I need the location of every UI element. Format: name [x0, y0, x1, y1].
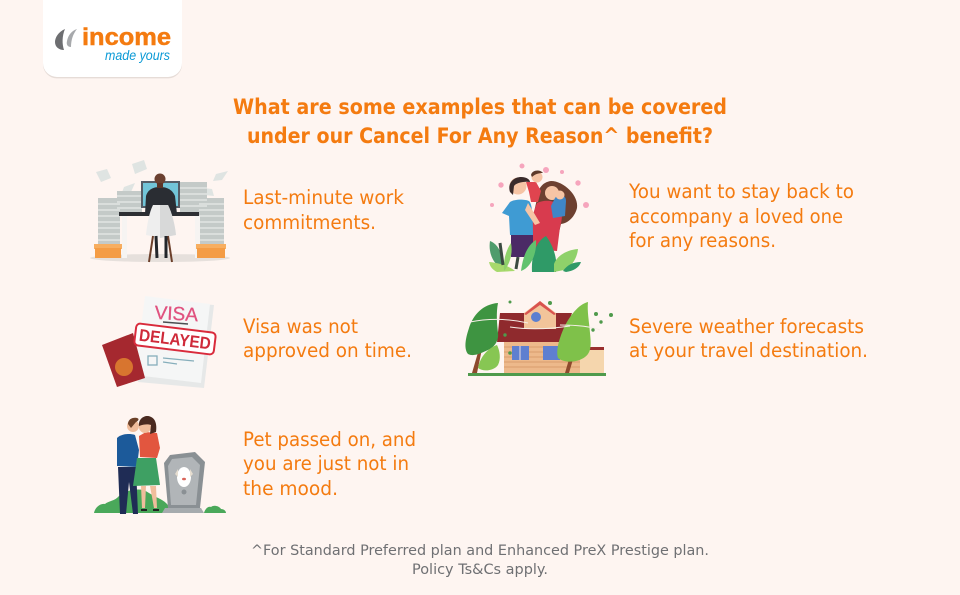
text: visa not approved [243, 315, 412, 362]
footnote: ^For Standard Preferred plan and Enhanced PreX Prestige plan. [251, 543, 709, 559]
text: pet passed on: Pet passed on, and [243, 428, 416, 451]
text: last-minute work [243, 186, 405, 234]
text: severe weather: at your travel destination. [629, 339, 868, 362]
title: under our Cancel For Any Reason^ benefit? [247, 124, 713, 148]
illustration: delayed visa: DELAYED [138, 326, 212, 353]
illustration: delayed visa: VISA [154, 303, 199, 326]
illustration: overworked person at desk [90, 160, 230, 262]
illustration: delayed visa [102, 296, 216, 388]
text: pet passed on: the mood. [243, 477, 338, 500]
text: visa not approved: approved on time. [243, 339, 412, 362]
text: pet passed on: you are just not in [243, 452, 409, 475]
footnote [251, 543, 709, 578]
title: What are some examples that can be covered [233, 95, 727, 119]
illustration: house in a storm [465, 300, 613, 376]
illustration: family with plants [489, 164, 589, 272]
text: visa not approved: Visa was not [243, 315, 358, 338]
text: pet passed on [243, 428, 416, 500]
logo tagline: made yours [105, 48, 170, 63]
footnote: Policy Ts&Cs apply. [412, 562, 548, 578]
text: stay back with a loved one: You want to stay back to [628, 180, 854, 203]
logo wordmark: income [82, 24, 171, 51]
text: stay back with a loved one: for any reasons. [629, 229, 776, 252]
text: stay back with a loved one [628, 180, 854, 252]
text: last-minute work: Last-minute work [243, 186, 405, 209]
text: last-minute work: commitments. [243, 211, 376, 234]
icon: logo mark [55, 29, 77, 50]
illustration: couple at pet grave [94, 416, 226, 514]
logo card [43, 0, 182, 78]
text: stay back with a loved one: accompany a loved one [629, 205, 843, 228]
text: severe weather: Severe weather forecasts [629, 315, 864, 338]
title [233, 95, 727, 148]
text: severe weather [629, 315, 868, 362]
